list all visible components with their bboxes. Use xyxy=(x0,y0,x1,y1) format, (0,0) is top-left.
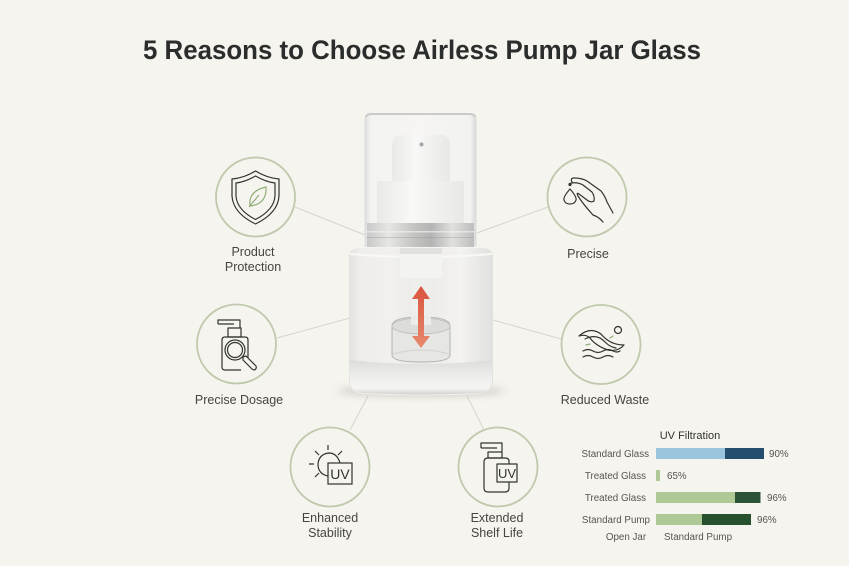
jar body xyxy=(349,248,493,396)
circle xyxy=(290,428,370,506)
label: Product xyxy=(231,245,275,259)
cap top rim xyxy=(366,114,475,117)
label: Enhanced xyxy=(302,511,358,525)
connector lines xyxy=(277,207,561,430)
row: treated glass 65% xyxy=(585,470,687,482)
row: standard pump 96%: Standard Pump xyxy=(582,515,651,526)
icon: hand with drop xyxy=(564,178,613,222)
reason: enhanced stability: Stability xyxy=(308,526,353,540)
icon: sun with UV box: UV xyxy=(330,466,350,482)
central jar illustration xyxy=(337,114,505,396)
label: Extended xyxy=(471,511,523,525)
bar chart: UV filtration: Standard Pump xyxy=(664,532,733,543)
nozzle hole xyxy=(420,142,424,146)
jar shoulder highlight xyxy=(350,254,492,257)
label: Precise Dosage xyxy=(195,393,283,407)
icon: shield with leaf xyxy=(232,171,279,224)
pump neck xyxy=(400,248,442,278)
pump collar xyxy=(377,181,464,223)
circle xyxy=(458,428,538,506)
reason: product protection: Protection xyxy=(225,260,281,274)
title: 5 Reasons to Choose Airless Pump Jar Glass xyxy=(143,35,701,65)
reason: enhanced stability xyxy=(290,428,370,540)
circle xyxy=(197,304,276,384)
row: treated glass 96% xyxy=(585,492,787,504)
reason: extended shelf life xyxy=(458,428,538,540)
inner cup xyxy=(392,317,450,362)
row: treated glass 65%: 65% xyxy=(667,471,687,482)
row: treated glass 65%: Treated Glass xyxy=(585,471,646,482)
row: standard glass 90%: Standard Glass xyxy=(581,449,649,460)
chart title: UV Filtration xyxy=(660,430,720,442)
row: treated glass 96%: Treated Glass xyxy=(585,493,646,504)
pump nozzle xyxy=(392,135,450,181)
arrow: up and down xyxy=(412,286,430,348)
reason: reduced waste xyxy=(561,305,649,407)
row: standard glass 90%: 90% xyxy=(769,449,789,460)
row: standard pump 96% xyxy=(582,514,777,526)
circle xyxy=(216,158,295,236)
icon: pump bottle with magnifier xyxy=(218,320,256,370)
row: standard glass 90% xyxy=(581,448,789,460)
dip tube xyxy=(411,278,431,325)
bar chart: UV filtration xyxy=(581,430,789,543)
row: treated glass 96%: 96% xyxy=(767,493,787,504)
reason: product protection xyxy=(216,158,295,274)
jar thick base xyxy=(350,360,492,394)
label: Reduced Waste xyxy=(561,393,649,407)
circle xyxy=(562,305,640,384)
circle xyxy=(548,158,626,236)
label: Precise xyxy=(567,247,609,261)
reason: precise dosage xyxy=(195,304,283,407)
reason: precise xyxy=(548,158,626,261)
icon: pump bottle with UV box: UV xyxy=(498,466,516,481)
reason: extended shelf life: Shelf Life xyxy=(471,526,523,540)
row: standard pump 96%: 96% xyxy=(757,515,777,526)
clear cap xyxy=(365,114,476,246)
jar shadow xyxy=(337,386,505,396)
axis labels: Open Jar xyxy=(606,532,647,543)
icon: wave xyxy=(579,326,624,358)
metal band xyxy=(367,223,474,247)
